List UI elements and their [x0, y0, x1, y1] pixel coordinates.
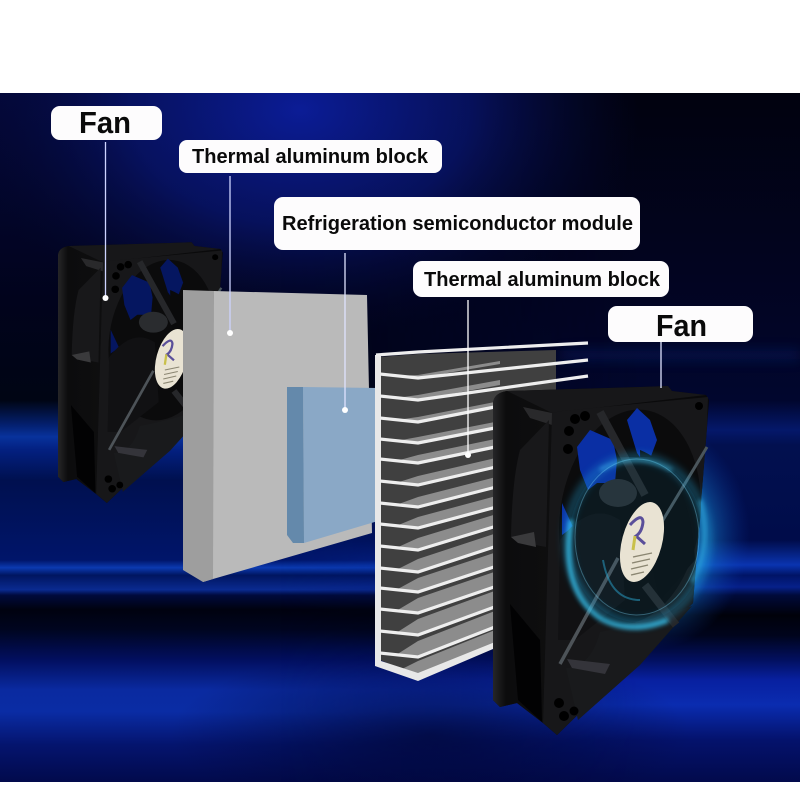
label: Fan (right): Fan	[656, 308, 707, 343]
leader line: semiconductor module	[342, 253, 348, 413]
leader line: heat sink	[465, 300, 471, 458]
label: Fan (left)	[51, 105, 162, 140]
label: Thermal aluminum block (lower): Thermal aluminum block	[424, 268, 661, 291]
refrigeration semiconductor module	[287, 387, 378, 543]
heat sink with fins	[375, 343, 588, 681]
label: Thermal aluminum block (upper)	[179, 140, 442, 173]
right fan	[493, 386, 750, 735]
label: Thermal aluminum block (upper): Thermal aluminum block	[192, 145, 429, 168]
thermal aluminum block (gray)	[183, 290, 372, 582]
leader line: right fan	[660, 342, 662, 388]
label: Refrigeration semiconductor module	[274, 197, 640, 250]
leader line: left fan	[102, 142, 108, 301]
label: Fan (right)	[608, 306, 753, 343]
label: Fan (left): Fan	[79, 105, 131, 140]
left fan	[58, 242, 227, 503]
label: Refrigeration semiconductor module: Refrigeration semiconductor module	[282, 212, 633, 235]
label: Thermal aluminum block (lower)	[413, 261, 669, 297]
airflow glow rings	[567, 457, 707, 627]
leader line: thermal block	[227, 176, 233, 336]
